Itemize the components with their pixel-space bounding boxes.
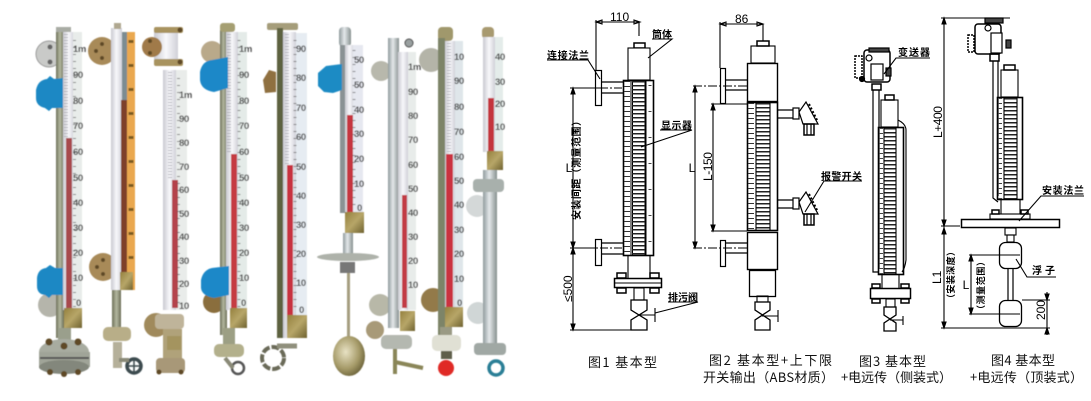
photo: gauge 6: 50	[354, 80, 364, 91]
photo: gauge 3: 10	[179, 301, 189, 312]
photo: gauge 7: 30	[408, 232, 418, 243]
figure 4 labels: 浮子	[1032, 262, 1055, 277]
photo: gauge 3: 90	[179, 114, 189, 125]
diagram: figure 1	[547, 10, 698, 330]
photo: gauge 1: 1m	[73, 44, 86, 55]
photo: gauge 1: 60	[73, 147, 83, 158]
photo: gauge 1: 40	[73, 198, 83, 209]
caption: figure 4	[970, 350, 1083, 386]
photo: gauge 8: 50	[454, 176, 464, 187]
photo: gauge 7: 80	[408, 111, 418, 122]
caption: figure 4: +电远传（顶装式）	[970, 367, 1083, 386]
photo: gauge 3: 1m	[179, 90, 192, 101]
figure 2 labels	[689, 152, 862, 183]
caption: figure 4: 图4 基本型	[991, 350, 1055, 369]
figure 1 labels: 排污阀	[668, 289, 698, 304]
figure 1 labels: 显示器	[661, 117, 692, 132]
caption: figure 3: 图3 基本型	[859, 351, 926, 370]
photo: gauge 7: 90	[408, 87, 418, 98]
figure 1 labels: L	[566, 161, 573, 175]
leader: transmitter	[884, 58, 930, 74]
figure 2 labels: 报警开关	[821, 168, 862, 183]
photo: gauge 3: 20	[179, 279, 189, 290]
figure 4 labels: L+400	[931, 106, 945, 138]
photo: gauge 1: 10	[73, 273, 83, 284]
photo: gauge 5: 80	[296, 73, 306, 84]
caption: figure 2	[703, 350, 834, 386]
photo: gauge 7: 1m	[408, 62, 421, 73]
figure 4 labels	[930, 106, 1084, 320]
caption: figure 2: 开关输出（ABS材质）	[703, 367, 834, 386]
caption: figure 3	[841, 351, 952, 386]
photo: gauge 1: 50	[73, 173, 83, 184]
photo: gauge 6: 0	[357, 203, 362, 214]
photo: gauge 6: 40	[354, 105, 364, 116]
photo: gauge 7: 50	[408, 184, 418, 195]
photo: gauge 8: 10	[454, 52, 464, 63]
gauge body	[962, 61, 1060, 326]
photo: gauge 4: 50	[239, 173, 249, 184]
figure 1 labels: 连接法兰	[547, 47, 589, 62]
photo: gauge 3: 80	[179, 138, 189, 149]
leader lines	[547, 39, 698, 313]
dimension 110: 110	[610, 10, 629, 24]
figure 1 labels	[547, 26, 698, 304]
switch: upper	[778, 102, 818, 135]
photo: gauge 4: 0	[241, 298, 246, 309]
figure 4 labels: L	[963, 278, 970, 292]
figure 2 labels: L-150	[701, 152, 715, 181]
photo: gauge 5: 20	[296, 249, 306, 260]
caption: figure 3: +电远传（侧装式）	[841, 367, 952, 386]
photo: gauge 4: 70	[239, 121, 249, 132]
photo: gauge 4: 90	[239, 70, 249, 81]
figure 4 labels: L1	[930, 270, 944, 284]
photo: gauge 3: 70	[179, 162, 189, 173]
figure 4 labels: （安装深度）	[944, 247, 957, 303]
photo: gauge 7	[366, 38, 423, 374]
photo: gauge 1: 30	[73, 223, 83, 234]
figure 2 labels: L	[689, 161, 696, 175]
photo: gauge 1: 70	[73, 121, 83, 132]
figure 1 labels: ≤500	[561, 275, 575, 302]
photo: gauge 2	[88, 23, 141, 373]
photo: gauge 4: 60	[239, 147, 249, 158]
photo: gauge 7: 70	[408, 135, 418, 146]
photo: gauge 8: 0	[457, 298, 462, 309]
switch: lower	[778, 192, 818, 225]
photo: gauge 8: 60	[454, 152, 464, 163]
photo: gauge 1: 0	[76, 298, 81, 309]
diagram: figure 3	[855, 48, 930, 331]
photo: gauge 9: 30	[495, 77, 505, 88]
photo: gauge 3: 60	[179, 185, 189, 196]
photo: gauge 4	[200, 23, 252, 374]
figure 4 labels: （测量范围）	[974, 257, 987, 314]
photo: gauge 6: 50	[354, 55, 364, 66]
photo: gauge 9: 40	[495, 52, 505, 63]
photo: gauge 5: 90	[296, 44, 306, 55]
dimensions	[941, 18, 1050, 335]
photo: gauge 3: 30	[179, 256, 189, 267]
photo: gauge 4: 40	[239, 198, 249, 209]
photo: gauge 4: 80	[239, 96, 249, 107]
photo: gauge 5: 30	[296, 220, 306, 231]
photo: gauge 4: 30	[239, 223, 249, 234]
photo: gauge 7: 40	[408, 208, 418, 219]
photo: gauge 7: 10	[408, 280, 418, 291]
photo: gauge 3: 50	[179, 209, 189, 220]
photo: gauge 9	[466, 27, 506, 375]
diagram: figure 4	[941, 18, 1084, 335]
caption: figure 1: 图1 基本型	[588, 352, 657, 371]
dimension 86	[720, 12, 763, 68]
photo: gauge 6	[317, 27, 379, 376]
transmitter	[855, 48, 891, 90]
photo: gauge 8: 30	[454, 225, 464, 236]
photo: gauge 4: 10	[239, 273, 249, 284]
figure 3 label: 变送器	[898, 44, 930, 59]
photo: gauge 9: 10	[495, 122, 505, 133]
dimension 110	[596, 10, 640, 70]
photo: gauge 5: 60	[296, 132, 306, 143]
photo: gauge 5: 40	[296, 191, 306, 202]
figure 4 labels: 200	[1034, 300, 1048, 320]
photo: gauge 1	[36, 27, 90, 377]
photo: gauge 8	[419, 27, 464, 376]
photo: gauge 7: 20	[408, 256, 418, 267]
diagram: figure 2	[693, 12, 862, 330]
photo: gauge 1: 90	[73, 70, 83, 81]
caption: figure 2: 图2 基本型+上下限	[709, 350, 832, 369]
photo: gauge 6: 30	[354, 129, 364, 140]
photo: gauge 4: 1m	[239, 44, 252, 55]
body and flanges	[596, 43, 662, 330]
transmitter	[968, 18, 1011, 61]
body	[693, 41, 778, 330]
leaders	[1016, 196, 1084, 277]
photo: gauge 5: 50	[296, 162, 306, 173]
photo: gauge 5: 70	[296, 103, 306, 114]
photo: gauge 1: 20	[73, 248, 83, 259]
photo: gauge 5	[262, 23, 307, 369]
photo: gauge 8: 70	[454, 127, 464, 138]
figure 1 labels: 安装间距（测量范围）	[568, 116, 583, 220]
photo: gauge 9: 20	[495, 99, 505, 110]
photo: gauge 8: 90	[454, 76, 464, 87]
photo: gauge 7: 60	[408, 160, 418, 171]
photo: gauge 4: 20	[239, 248, 249, 259]
leader: alarm switch	[805, 181, 862, 212]
photo: gauge 3: 40	[179, 232, 189, 243]
photo: gauge 8: 40	[454, 200, 464, 211]
photo: gauge 5: 10	[296, 278, 306, 289]
photo: gauge 3	[142, 27, 192, 374]
dimension L and 500	[570, 88, 631, 330]
figure 4 labels: 安装法兰	[1042, 182, 1084, 197]
photo: gauge 6: 10	[354, 179, 364, 190]
photo: gauge 8: 20	[454, 249, 464, 260]
dimension 86: 86	[735, 12, 749, 26]
gauge body	[870, 90, 910, 331]
dimension L and L-150	[693, 86, 747, 248]
figure 1 labels: 筒体	[652, 26, 672, 41]
photo: gauge 8: 80	[454, 102, 464, 113]
photo: gauge 8: 10	[454, 274, 464, 285]
photo: gauge 1: 80	[73, 96, 83, 107]
photo: gauge 6: 20	[354, 154, 364, 165]
photo: gauge 5: 0	[299, 305, 304, 316]
